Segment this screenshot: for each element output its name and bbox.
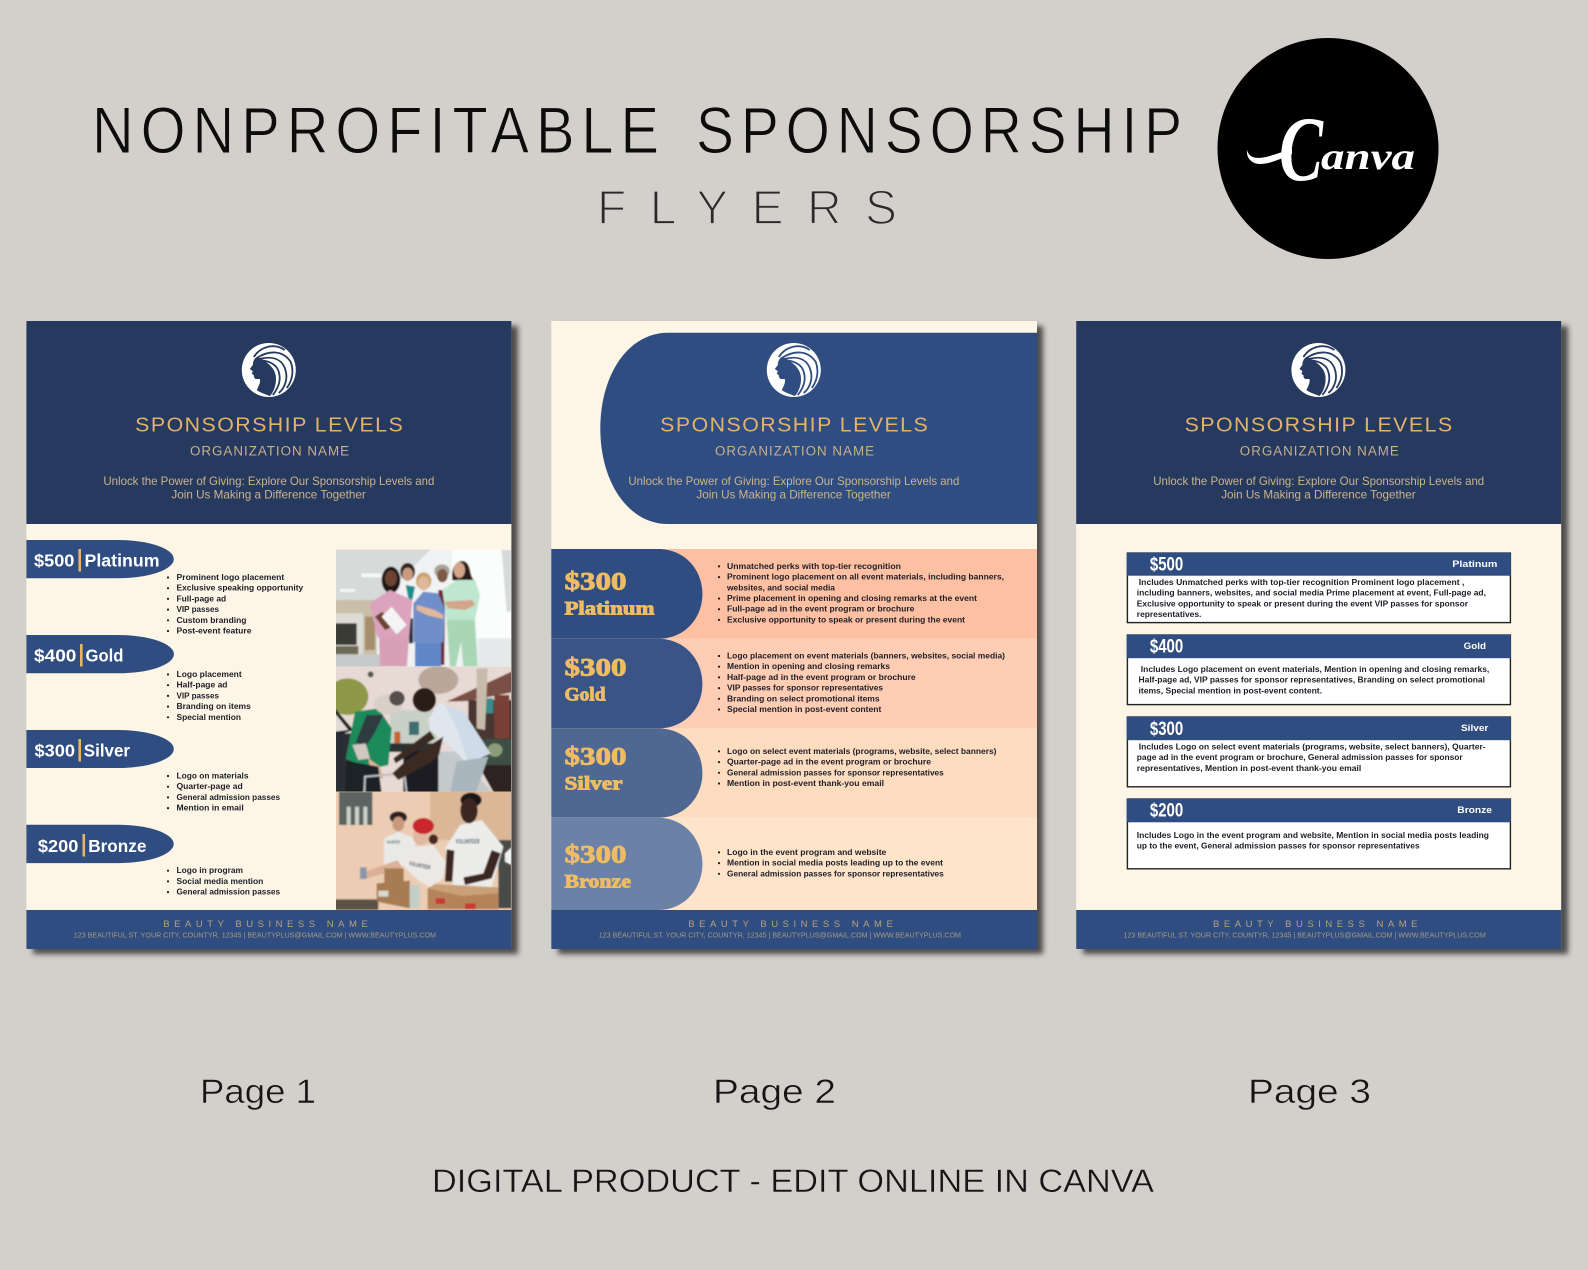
icon: logo (767, 343, 821, 397)
footer: page 3: 123 BEAUTIFUL ST. YOUR CITY, COUNTYR, 12345 | BEAUTYPLUS@GMAIL.COM | WWW.BEAUTYPLUS.COM (1124, 931, 1486, 940)
panel: page 1 flyer (26, 321, 518, 954)
list: platinum: Custom branding (176, 616, 247, 625)
tier row: gold: Branding on select promotional items (727, 694, 880, 703)
list: gold: Branding on items (176, 702, 251, 711)
tier row: silver: General admission passes for sponsor representatives (727, 768, 944, 777)
tier pill: silver: Silver (84, 741, 130, 761)
title: SPONSORSHIP (696, 93, 1189, 167)
heading: sponsorship levels: SPONSORSHIP LEVELS (1185, 413, 1454, 436)
tier pill: platinum (26, 540, 174, 578)
title (92, 93, 1189, 167)
list: platinum: VIP passes (176, 605, 220, 614)
tier row: silver: $300 (564, 744, 626, 771)
panel: page 3 flyer (1076, 321, 1568, 954)
tier card: gold: Includes Logo placement on event materials, Mention in opening and closing remarks, (1141, 665, 1489, 674)
list: platinum: Full-page ad (176, 594, 226, 603)
tier card: platinum: Includes Unmatched perks with top-tier recognition Prominent logo placement , (1139, 578, 1464, 587)
tier row: silver (551, 728, 1037, 818)
intro text: Unlock the Power of Giving: Explore Our Sponsorship Levels and (1153, 474, 1484, 488)
tier row: bronze: Logo in the event program and website (727, 848, 887, 857)
tier row: gold: Half-page ad in the event program or brochure (727, 673, 916, 682)
list: silver: General admission passes (176, 793, 281, 802)
heading: sponsorship levels: SPONSORSHIP LEVELS (660, 413, 929, 436)
tier row: gold: Logo placement on event materials (banners, websites, social media) (727, 652, 1005, 660)
intro text: Join Us Making a Difference Together (696, 488, 891, 502)
tier row: platinum: Platinum (564, 599, 655, 619)
tier card: bronze: $200 (1150, 801, 1183, 822)
tier row: bronze (551, 818, 1037, 910)
badge: Canva (1218, 38, 1438, 259)
organization name: ORGANIZATION NAME (715, 444, 875, 459)
intro text: Join Us Making a Difference Together (171, 488, 366, 502)
tier card: silver: Includes Logo on select event materials (programs, website, select banners), Quarter- (1139, 742, 1486, 752)
footer tagline: DIGITAL PRODUCT - EDIT ONLINE IN CANVA (432, 1163, 1155, 1199)
list: gold: Logo placement (176, 670, 242, 679)
tier row: gold: Mention in opening and closing remarks (727, 662, 891, 671)
tier row: silver: Quarter-page ad in the event program or brochure (727, 758, 932, 767)
organization name: ORGANIZATION NAME (1240, 444, 1400, 459)
list: silver (167, 772, 281, 813)
tier row: silver: Logo on select event materials (programs, website, select banners) (727, 747, 997, 756)
title: NONPROFITABLE (92, 93, 666, 167)
intro text (628, 474, 959, 502)
tier card: bronze: up to the event, General admission passes for sponsor representatives (1137, 842, 1420, 851)
list: platinum: Exclusive speaking opportunity (176, 584, 304, 593)
tier card: gold: Half-page ad, VIP passes for sponsor representatives, Branding on select promotional (1138, 676, 1485, 685)
tier card: gold (1127, 635, 1511, 705)
tier card: gold: Gold (1464, 641, 1486, 652)
list: platinum: Prominent logo placement (176, 573, 285, 582)
caption: page 3: Page 3 (1248, 1073, 1371, 1111)
tier card: platinum: representatives. (1137, 610, 1201, 619)
tier row: platinum: websites, and social media (726, 583, 836, 592)
tier card: platinum: including banners, websites, and social media Prime placement at event, Full-page ad, (1137, 589, 1486, 598)
tier pill: platinum: $500 (34, 550, 75, 570)
badge: Canva: anva (1321, 136, 1415, 178)
tier row: gold: VIP passes for sponsor representatives (727, 684, 884, 693)
footer: page 2: BEAUTY BUSINESS NAME (688, 919, 893, 930)
tier card: gold: items, Special mention in post-event content. (1138, 686, 1322, 695)
tier pill: platinum: Platinum (84, 550, 160, 570)
tier card: platinum: Platinum (1452, 559, 1497, 570)
tier row: gold: $300 (564, 654, 626, 681)
tier card: gold: $400 (1150, 637, 1183, 658)
footer: page 1 (26, 910, 511, 949)
footer: page 2: 123 BEAUTIFUL ST. YOUR CITY, COUNTYR, 12345 | BEAUTYPLUS@GMAIL.COM | WWW.BEAUTYPLUS.COM (599, 931, 961, 940)
header blob (600, 333, 1037, 524)
tier card: bronze (1127, 799, 1511, 869)
tier pill: silver: $300 (34, 741, 75, 761)
tier row: platinum: Exclusive opportunity to speak or present during the event (727, 615, 965, 624)
tier pill: bronze: $200 (38, 836, 79, 856)
tier row: platinum: Unmatched perks with top-tier recognition (727, 562, 901, 571)
tier row: bronze: Mention in social media posts leading up to the event (727, 859, 943, 868)
tier pill: gold (26, 635, 174, 673)
list: gold: Special mention (176, 713, 241, 722)
list: platinum: Post-event feature (176, 626, 252, 636)
footer: page 1: BEAUTY BUSINESS NAME (163, 919, 368, 930)
footer: page 3 (1076, 910, 1561, 949)
tier card: bronze: Includes Logo in the event program and website, Mention in social media posts leading (1137, 831, 1489, 840)
tier card: silver: $300 (1150, 719, 1183, 740)
tier row: platinum: Prime placement in opening and closing remarks at the event (727, 594, 977, 603)
list: silver: Logo on materials (176, 772, 249, 780)
intro text (103, 474, 434, 502)
tier row: platinum: $300 (564, 569, 626, 596)
intro text: Unlock the Power of Giving: Explore Our Sponsorship Levels and (103, 474, 434, 488)
intro text (1153, 474, 1484, 502)
tier row: gold: Gold (564, 685, 606, 705)
tier card: silver: Silver (1461, 723, 1489, 734)
photo: helping elderly man (336, 666, 511, 792)
tier card: silver (1127, 717, 1511, 787)
organization name: ORGANIZATION NAME (190, 444, 350, 459)
list: bronze: General admission passes (176, 888, 281, 897)
list: bronze (167, 866, 281, 897)
tier row: platinum: Prominent logo placement on all event materials, including banners, (727, 573, 1004, 582)
list: bronze: Logo in program (176, 866, 243, 875)
tier row: silver: Silver (564, 774, 622, 794)
list: bronze: Social media mention (176, 877, 263, 886)
footer: page 2 (551, 910, 1037, 949)
tier row: platinum (551, 549, 1037, 639)
icon: logo (242, 343, 296, 397)
photo: volunteers: VOLUNTEER (387, 840, 400, 845)
tier pill: bronze (26, 825, 174, 863)
photo: volunteers (335, 790, 515, 915)
caption: page 1: Page 1 (200, 1073, 316, 1111)
list: silver: Quarter-page ad (176, 782, 243, 791)
tier row: silver: Mention in post-event thank-you email (727, 779, 884, 788)
tier pill: bronze: Bronze (88, 836, 147, 856)
tier row: bronze: General admission passes for sponsor representatives (727, 869, 944, 878)
heading: sponsorship levels: SPONSORSHIP LEVELS (135, 413, 404, 436)
caption: page 2: Page 2 (713, 1073, 836, 1111)
tier pill: gold: $400 (34, 646, 77, 666)
footer: page 1: 123 BEAUTIFUL ST. YOUR CITY, COUNTYR, 12345 | BEAUTYPLUS@GMAIL.COM | WWW.BEAUTYPLUS.COM (74, 931, 436, 940)
tier pill: gold: Gold (86, 646, 124, 666)
panel: page 2 flyer (551, 321, 1043, 954)
tier card: silver: page ad in the event program or brochure, General admission passes for sponsor (1137, 753, 1463, 762)
tier card: silver: representatives, Mention in post-event thank-you email (1137, 764, 1361, 773)
tier row: bronze: $300 (564, 841, 626, 868)
tier card: platinum: $500 (1150, 555, 1183, 576)
footer: page 3: BEAUTY BUSINESS NAME (1213, 919, 1418, 930)
intro text: Join Us Making a Difference Together (1221, 488, 1416, 502)
badge: Canva: C (1279, 98, 1324, 200)
tier row: gold: Special mention in post-event content (727, 705, 882, 714)
photo: volunteers: VOLUNTEER (408, 861, 431, 871)
intro text: Unlock the Power of Giving: Explore Our Sponsorship Levels and (628, 474, 959, 488)
tier pill: silver (26, 730, 174, 768)
subtitle: FLYERS (597, 182, 897, 235)
photo: medical team (335, 545, 515, 670)
tier card: platinum: Exclusive opportunity to speak or present during the event VIP passes for sponsor (1137, 599, 1468, 608)
icon: logo (1291, 343, 1345, 397)
list: platinum (167, 573, 304, 636)
list: silver: Mention in email (176, 804, 244, 813)
tier row: gold (551, 639, 1037, 728)
tier row: platinum: Full-page ad in the event program or brochure (727, 605, 915, 614)
list: gold: Half-page ad (176, 681, 228, 690)
list: gold (167, 670, 251, 722)
tier card: bronze: Bronze (1457, 805, 1492, 816)
list: gold: VIP passes (176, 691, 220, 700)
photo: volunteers: VOLUNTEER (456, 839, 480, 845)
tier row: bronze: Bronze (564, 872, 631, 892)
tier card: platinum (1127, 552, 1511, 623)
